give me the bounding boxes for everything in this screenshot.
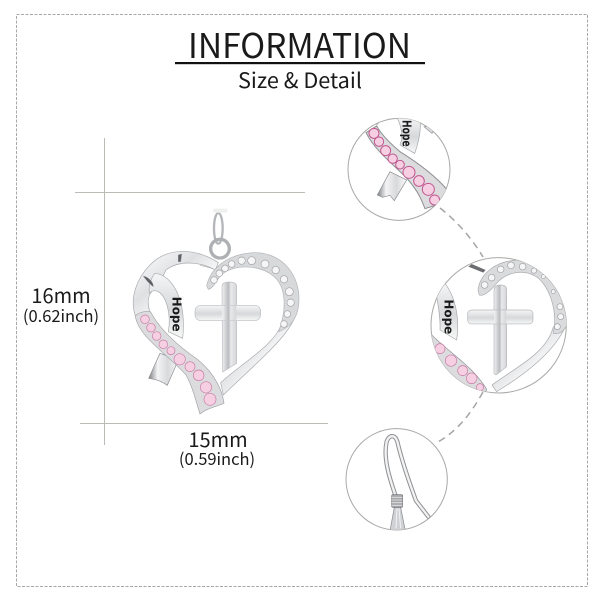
ribbon tail (149, 353, 178, 385)
subtitle: Size & Detail (238, 65, 362, 95)
engraved Hope: Hope (442, 299, 457, 334)
hook wire (386, 436, 428, 517)
title underline (175, 62, 425, 64)
engraved Hope: Hope (400, 120, 414, 147)
pave band of clear stones (207, 253, 299, 332)
dashed connector arc: upper (440, 208, 483, 257)
pink stone band (366, 126, 447, 209)
title: INFORMATION (188, 19, 411, 68)
upper left heart edge (468, 264, 486, 273)
pendant: heart with cross and ribbon (133, 211, 299, 414)
height label: 16mm (31, 280, 91, 309)
detail circle: earring hook (346, 429, 447, 531)
dimension guide lines (75, 138, 328, 445)
height label (23, 280, 99, 327)
Hope ribbon band (436, 284, 458, 340)
width label: (0.59inch) (179, 446, 255, 470)
ribbon tail detail (377, 172, 407, 201)
pink stone band (431, 334, 487, 397)
clear stones (211, 257, 294, 327)
circle outline (431, 258, 566, 393)
circle outline (348, 118, 450, 220)
heart fragment (423, 126, 434, 134)
lower right band (492, 323, 567, 392)
metal reflections (143, 254, 213, 287)
pendant bail (211, 211, 229, 258)
ribbon loop with Hope band (149, 273, 183, 338)
engraved Hope: Hope (170, 297, 185, 332)
dashed connector arc: lower (438, 392, 483, 442)
detail circle: ribbon stones (348, 117, 450, 220)
wires below coil (390, 507, 405, 531)
wire coil (392, 495, 403, 507)
height label: (0.62inch) (23, 303, 99, 327)
heart left band (133, 251, 218, 316)
pink stones (141, 315, 216, 405)
pink stones (369, 128, 440, 205)
ribbon band with pink stones (135, 311, 224, 414)
clear stones (481, 262, 564, 330)
width label (179, 424, 255, 470)
cross (468, 285, 533, 375)
detail circle: heart and cross (430, 258, 568, 397)
width label: 15mm (188, 424, 248, 453)
ribbon Hope band (397, 117, 420, 153)
heart right band (221, 303, 299, 395)
circle outline (346, 429, 447, 530)
pink stones (435, 344, 484, 391)
clear stone arch (478, 260, 568, 334)
cross (195, 282, 261, 372)
